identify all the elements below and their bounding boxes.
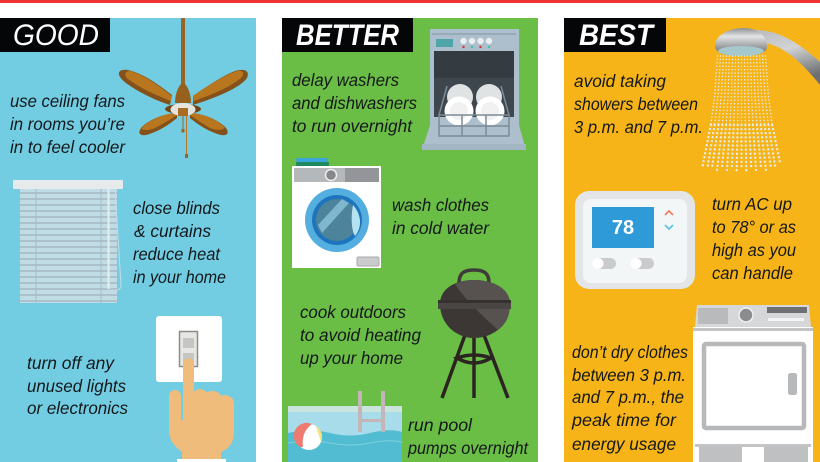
text: lights: or electronics [27,398,128,418]
text: cook outdoors: cook outdoors [300,302,406,322]
icon: shower head [702,28,820,172]
text: showers: 3 p.m. and 7 p.m. [574,117,703,137]
text: ceiling fans: use ceiling fans [10,91,125,111]
text: dryer: between 3 p.m. [572,365,686,385]
text: blinds: & curtains [134,221,211,241]
text: dryer: don’t dry clothes [572,342,688,362]
text: ceiling fans: in to feel cooler [10,137,126,157]
text: dryer: and 7 p.m., the [572,387,684,407]
text: thermostat: high as you [712,240,796,260]
text: ceiling fans: in rooms you’re [10,114,125,134]
text: thermostat: turn AC up [712,194,792,214]
text: thermostat: to 78° or as [712,217,796,237]
icon: ceiling fan [119,18,248,158]
icon: hand on light switch [156,316,234,462]
text: blinds: in your home [133,267,226,287]
text: lights [27,353,128,418]
text: dishwashers: to run overnight [292,116,413,136]
panel: better [282,18,538,462]
text: cook outdoors: up your home [300,348,403,368]
icon: swimming pool [288,391,402,462]
text: ceiling fans [10,91,126,157]
icon: thermostat: 78 [612,217,634,239]
text: dryer [571,342,688,454]
icon: dishwasher [422,29,526,150]
text: wash clothes: wash clothes [392,195,489,215]
text: cook outdoors: to avoid heating [300,325,421,345]
text: blinds: close blinds [133,198,220,218]
water spray [702,56,780,172]
panel: good [0,18,256,462]
text: cook outdoors [300,302,421,368]
text: showers: avoid taking [574,71,666,91]
text: pool pumps [407,415,529,458]
text: blinds [133,198,226,287]
text: lights: unused lights [27,376,126,396]
icon: washing machine [292,158,381,268]
text: thermostat: can handle [712,263,793,283]
text: showers: showers between [574,94,698,114]
text: thermostat [712,194,796,283]
heading: good: GOOD [13,19,99,52]
text: showers [574,71,703,137]
text: wash clothes [392,195,490,238]
text: dishwashers: delay washers [292,70,399,90]
text: dryer: peak time for [571,410,677,430]
heading: best: BEST [579,19,655,52]
text: lights: turn off any [27,353,115,373]
icon: kettle grill [438,270,511,398]
text: dryer: energy usage [572,434,676,454]
heading: better: BETTER [296,19,399,52]
icon: window blinds [13,180,123,303]
text: wash clothes: in cold water [392,218,490,238]
text: dishwashers: and dishwashers [292,93,417,113]
text: blinds: reduce heat [133,244,221,264]
text: dishwashers [292,70,417,136]
text: pool pumps: run pool [408,415,473,435]
text: pool pumps: pumps overnight [407,438,529,458]
panel: best [564,18,820,462]
icon: thermostat [575,191,695,289]
icon: clothes dryer [693,305,813,462]
